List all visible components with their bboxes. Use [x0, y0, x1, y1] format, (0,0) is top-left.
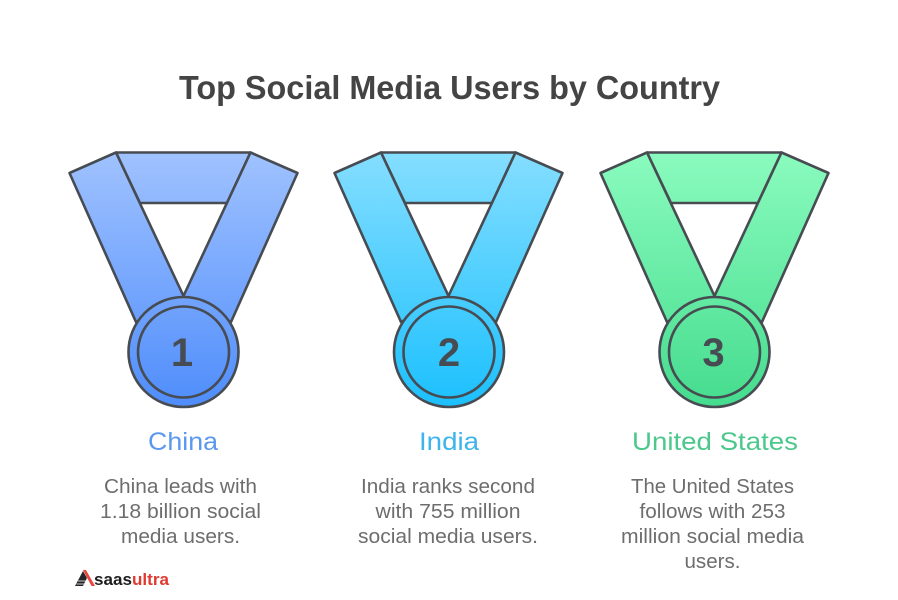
text: United States description	[621, 476, 805, 573]
icon: India medal 2: 2	[438, 331, 460, 375]
heading: India: India	[419, 428, 479, 456]
text: United States description: million social media	[621, 526, 805, 548]
text: China description: China leads with	[104, 476, 257, 498]
text: United States description: users.	[684, 551, 740, 573]
text: logo wordmark: saasultra	[94, 570, 170, 589]
text: United States description: The United States	[631, 476, 794, 498]
heading: China: China	[148, 428, 218, 456]
panel: China	[70, 152, 298, 548]
text: India description: social media users.	[358, 526, 538, 548]
text: China description	[100, 476, 261, 548]
text: India description: India ranks second	[361, 476, 535, 498]
text: China description: media users.	[121, 526, 240, 548]
icon: logo triangle	[75, 570, 95, 586]
panel: United States	[600, 152, 828, 573]
text: India description	[358, 476, 538, 548]
icon: United States medal 3: 3	[702, 331, 725, 375]
icon: United States medal 3	[600, 152, 828, 407]
title: Top Social Media Users by Country	[179, 69, 721, 106]
icon: China medal 1: 1	[171, 331, 193, 375]
icon: India medal 2	[334, 152, 562, 407]
text: United States description: follows with 253	[640, 501, 786, 523]
panel: India	[334, 152, 562, 548]
text: India description: with 755 million	[374, 501, 520, 523]
icon: China medal 1	[70, 152, 298, 407]
heading: United States: United States	[632, 428, 798, 456]
text: China description: 1.18 billion social	[100, 501, 261, 523]
logo: saasultra	[75, 570, 170, 589]
